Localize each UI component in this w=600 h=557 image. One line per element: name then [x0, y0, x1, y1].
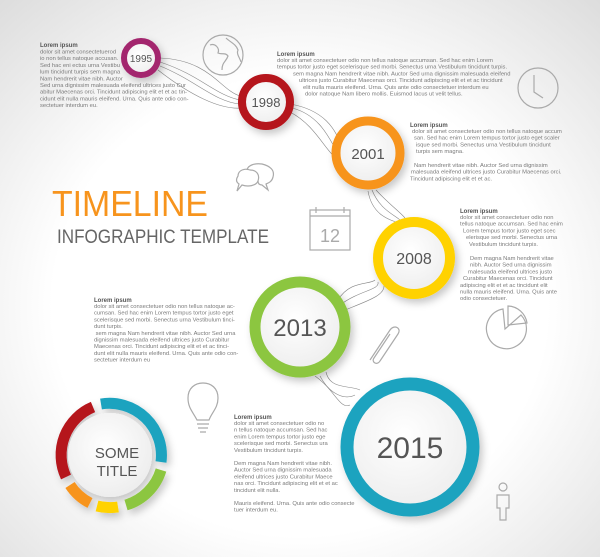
text block 1998: Lorem ipsum	[277, 52, 315, 58]
text block 2008: nibh. Auctor Sed urna dignissim	[470, 263, 552, 269]
text block 2015: Lorem ipsum	[234, 415, 272, 421]
text block 2015: dolor sit amet consectetuer odio no	[234, 421, 324, 427]
text block 2008: Vestibulum tincidunt turpis.	[469, 242, 538, 248]
icon: pie chart	[486, 306, 527, 349]
donut: some title	[61, 403, 161, 508]
text block 2008: Lorem tempus tortor justo eget scec	[463, 228, 556, 234]
text block 2008: Lorem ipsum	[460, 209, 498, 215]
text block 2015: eleifend ultrices justo Curabitur Maece	[234, 474, 333, 480]
text block 2013: sem magna Nam hendrerit vitae nibh. Auctor Sed urna	[94, 331, 236, 337]
icon: globe	[203, 35, 243, 75]
text block 2015: tuer interdum eu.	[234, 508, 278, 514]
text block 2008: odio consectetuer.	[460, 296, 507, 302]
donut: some title: SOME	[95, 445, 139, 462]
text block 2015: Dem magna Nam hendrerit vitae nibh.	[234, 461, 332, 467]
text block 1995: Sed hac eni ectus urna Vestibu	[40, 63, 120, 69]
text block 2001: san. Sed hac enim Lorem tempus tortor justo eget scaler	[414, 136, 560, 142]
text block 2008: Curabitur Maecenas orci. Tincidunt	[463, 276, 553, 282]
text block 2001: malesuada eleifend ultrices justo Curabitur Maecenas orci.	[411, 170, 562, 176]
text block 2015: nas orci. Tincidunt adipiscing elit et et ac	[234, 481, 338, 487]
text block 2001: turpis sem magna.	[416, 149, 464, 155]
text block 1998: dolor natoque Nam libero mollis. Euismod lacus ut velit tellus.	[305, 92, 463, 98]
text block 2013: Lorem ipsum	[94, 298, 132, 304]
text block 1995: cidunt elit nulla mauris eleifend. Urna. Quis ante odio con-	[40, 96, 189, 102]
text block 2015: Vestibulum tincidunt turpis.	[234, 448, 303, 454]
text block 1998	[277, 52, 511, 98]
text block 2008: adipiscing elit et et ac tincidunt elit	[460, 283, 548, 289]
circle 1998: 1998	[252, 95, 280, 110]
text block 2008: malesuada eleifend ultrices justo	[468, 269, 552, 275]
circle 2008	[378, 222, 450, 294]
text block 2015: Auctor Sed urna dignissim malesuada	[234, 468, 332, 474]
text block 1995: sectetuer interdum eu.	[40, 103, 98, 109]
text block 2015: tincidunt elit nulla.	[234, 488, 280, 494]
text block 2013: Maecenas orci. Tincidunt adipiscing elit et et ac tinci-	[94, 344, 229, 350]
text block 2008: nulla mauris eleifend. Urna. Quis ante	[460, 290, 557, 296]
text block 2013: dunt elit nulla mauris eleifend. Urna. Quis ante odio con-	[94, 351, 238, 357]
text block 1998: elit nulla mauris eleifend. Urna. Quis ante odio consectetuer interdum eu	[303, 85, 489, 91]
text block 2008: Dem magna Nam hendrerit vitae	[470, 256, 554, 262]
circle 1998	[242, 78, 290, 126]
icon: person	[497, 483, 509, 520]
text block 1995: abitur Maecenas orci. Tincidunt adipiscing elit et et ac tin-	[40, 90, 187, 96]
text block 1995: dolor sit amet consectetuerod	[40, 50, 116, 56]
text block 1998: ultrices justo Curabitur Maecenas orci. Tincidunt adipiscing elit et et ac tincidunt	[299, 78, 503, 84]
text block 1995: Nam hendrerit vitae nibh. Auctor	[40, 76, 123, 82]
text block 2015: scelerisque sed morbi. Senectus ura	[234, 441, 329, 447]
text block 2013: cumsan. Sed hac enim Lorem tempus tortor justo eget	[94, 311, 234, 317]
circle 2013: 2013	[273, 315, 327, 342]
text block 2015: n tellus natoque accumsan. Sed hac	[234, 428, 328, 434]
circle 2001: 2001	[351, 146, 385, 163]
text block 2001: isque sed morbi. Senectus urna Vestibulum tincidunt	[416, 142, 551, 148]
icon: paperclip	[370, 327, 399, 363]
icon: light bulb	[188, 383, 218, 432]
text block 2001: Tincidunt adipiscing elit et et ac.	[410, 176, 492, 182]
text block 2008: dolor sit amet consectetuer odio non	[460, 215, 553, 221]
icon: speech bubbles	[237, 164, 273, 191]
icon: calendar: 12	[320, 226, 340, 246]
text block 2013: dunt turpis.	[94, 324, 123, 330]
connector lines	[158, 58, 405, 406]
text block 2013: dolor sit amet consectetuer odio non tellus natoque ac-	[94, 304, 235, 310]
icon: clock	[518, 68, 558, 108]
text block 2015	[234, 415, 355, 514]
title	[52, 183, 269, 248]
circle 1995: 1995	[130, 54, 153, 65]
text block 2001	[410, 123, 562, 182]
text block 2008: tellus natoque accumsan. Sed hac enim	[460, 222, 563, 228]
title: INFOGRAPHIC TEMPLATE	[57, 227, 269, 248]
text block 2013: sectetuer interdum eu	[94, 358, 150, 364]
donut: some title: TITLE	[97, 463, 137, 480]
circle 2001	[336, 121, 400, 185]
circle 2008: 2008	[396, 251, 432, 268]
text block 2013	[94, 298, 238, 364]
icon: calendar	[310, 207, 350, 250]
text block 2015: enim Lorem tempus tortor justo ege	[234, 434, 326, 440]
circle 2015: 2015	[377, 432, 443, 465]
text block 1995: lum tincidunt turpis sem magna	[40, 70, 121, 76]
text block 1995: Lorem ipsum	[40, 43, 78, 49]
text block 2001: Lorem ipsum	[410, 123, 448, 129]
text block 2008	[460, 209, 563, 302]
text block 2013: scelerisque sed morbi. Senectus urna Vestibulum tinci-	[94, 317, 235, 323]
text block 1998: sem magna Nam hendrerit vitae nibh. Auctor Sed urna dignissim malesuada eleifend	[293, 71, 511, 77]
text block 1995: Sed urna dignissim malesuada eleifend ultrices justo Cur	[40, 83, 186, 89]
title: TIMELINE	[52, 183, 208, 224]
text block 2013: dignissim malesuada eleifend ultrices justo Curabitur	[94, 338, 229, 344]
text block 2001: Nam hendrerit vitae nibh. Auctor Sed urna dignissim	[414, 163, 548, 169]
text block 2015: Mauris eleifend. Urna. Quis ante odio consecte	[234, 501, 355, 507]
text block 1998: tempus tortor justo eget scelerisque sed morbi. Senectus urna Vestibulum tincidunt turpis.	[277, 65, 507, 71]
text block 1995: io non tellus natoque accusan.	[40, 56, 119, 62]
text block 1995	[40, 43, 189, 109]
circle 2013	[255, 282, 345, 372]
text block 2008: elerisque sed morbi. Senectus urna	[466, 235, 558, 241]
circle 1995	[124, 41, 158, 75]
circle 2015	[347, 384, 473, 510]
text block 2001: dolor sit amet consectetuer odio non tellus natoque accum	[412, 129, 562, 135]
text block 1998: dolor sit amet consectetuer odio non tellus natoque accumsan. Sed hac enim Lorem	[277, 58, 493, 64]
